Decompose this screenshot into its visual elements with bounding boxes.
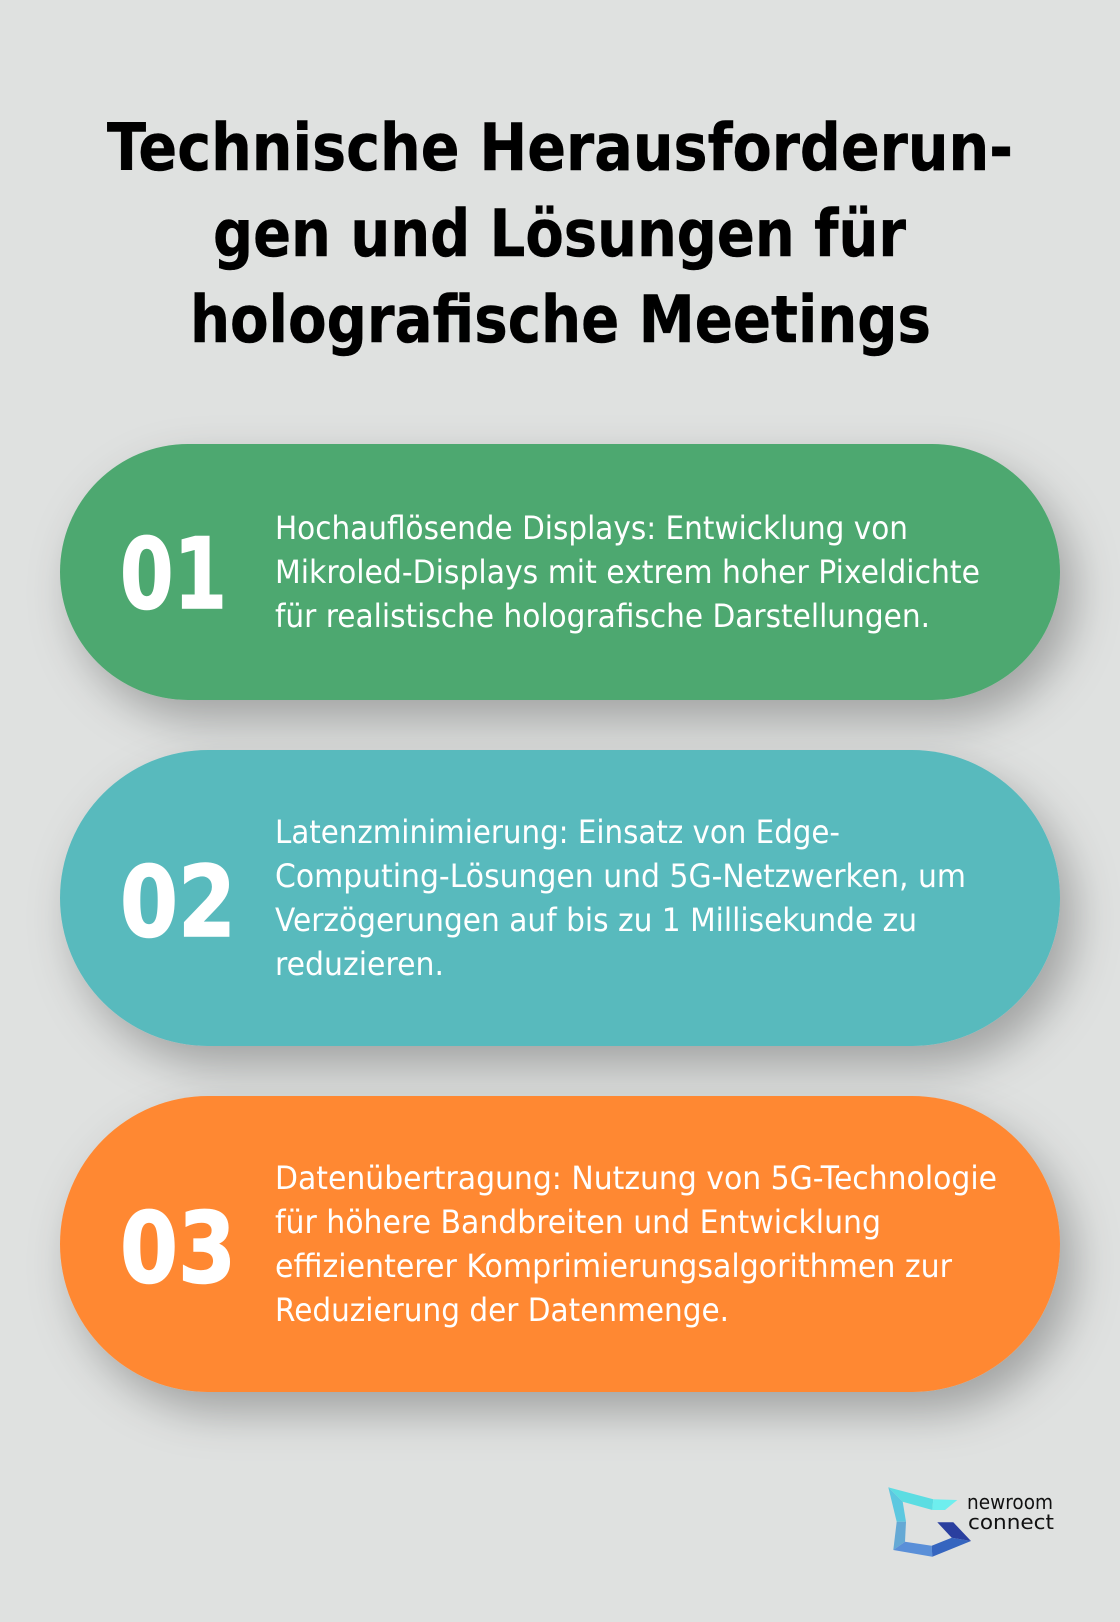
logo wordmark: connect: [968, 1510, 1054, 1534]
logo wordmark: newroom: [967, 1490, 1053, 1514]
text block 02: [275, 813, 966, 983]
text block 02: reduzieren.: [275, 945, 444, 983]
number 01: 01: [120, 518, 227, 632]
panel: 01 Hochauflösende Displays: [60, 444, 1060, 700]
text block 03: [275, 1159, 997, 1329]
text block 01: für realistische holografische Darstellungen.: [275, 597, 930, 635]
panel: 03 Datenübertragung: [60, 1096, 1060, 1392]
logo wordmark: [967, 1490, 1054, 1534]
text block 02: Verzögerungen auf bis zu 1 Millisekunde zu: [275, 901, 917, 939]
title: [107, 111, 1013, 358]
text block 03: effizienterer Komprimierungsalgorithmen zur: [275, 1247, 953, 1285]
text block 02: Computing-Lösungen und 5G-Netzwerken, um: [275, 857, 966, 895]
title: Technische Herausforderun-: [107, 111, 1013, 186]
text block 01: Hochauflösende Displays: Entwicklung von: [275, 509, 908, 547]
text block 03: für höhere Bandbreiten und Entwicklung: [275, 1203, 881, 1241]
number 02: 02: [120, 846, 236, 960]
text block 02: Latenzminimierung: Einsatz von Edge-: [275, 813, 840, 851]
text block 03: Datenübertragung: Nutzung von 5G-Technologie: [275, 1159, 997, 1197]
title: holografische Meetings: [190, 283, 931, 358]
number 03: 03: [120, 1192, 236, 1306]
logo: newroom connect: [888, 1487, 1054, 1557]
icon: logo mark: [888, 1487, 971, 1557]
panel: 02 Latenzminimierung: [60, 750, 1060, 1046]
text block 03: Reduzierung der Datenmenge.: [275, 1291, 729, 1329]
text block 01: [275, 509, 980, 635]
title: gen und Lösungen für: [213, 197, 906, 272]
text block 01: Mikroled-Displays mit extrem hoher Pixeldichte: [275, 553, 980, 591]
